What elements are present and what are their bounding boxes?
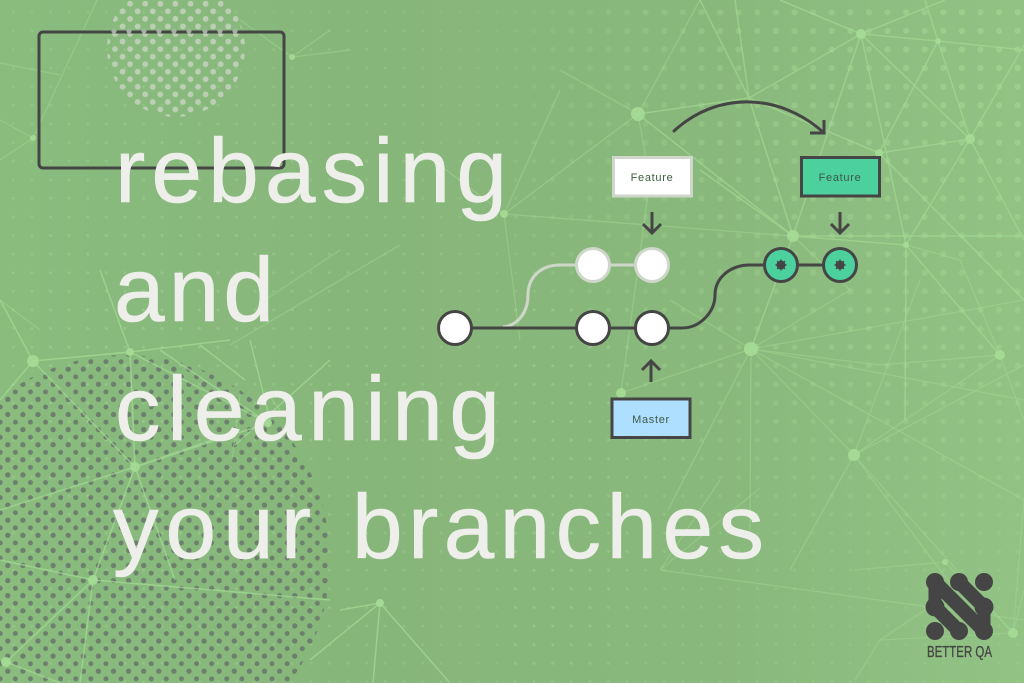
title: and bbox=[114, 240, 274, 341]
light halftone circle bbox=[107, 0, 245, 117]
git rebase diagram bbox=[438, 102, 880, 438]
logo: Better QA bbox=[926, 573, 994, 661]
title: cleaning bbox=[115, 359, 500, 460]
title: branches bbox=[352, 477, 764, 578]
commit markers bbox=[776, 260, 846, 270]
pointer arrows bbox=[642, 212, 849, 382]
new feature label bbox=[802, 158, 880, 196]
curved rebase arrow bbox=[674, 102, 824, 133]
title bbox=[113, 121, 764, 578]
master label bbox=[612, 399, 690, 438]
old feature label bbox=[614, 158, 692, 196]
outlined rectangle bbox=[39, 32, 284, 168]
master label: Master bbox=[632, 414, 670, 426]
logo wordmark: BETTER QA bbox=[927, 644, 992, 661]
light dots over rectangle edge bbox=[111, 28, 238, 34]
old feature label: Feature bbox=[631, 172, 673, 184]
title: rebasing bbox=[115, 121, 507, 222]
master branch and rebased branch bbox=[438, 248, 856, 344]
new feature label: Feature bbox=[819, 172, 861, 184]
old feature branch bbox=[503, 248, 668, 327]
dark halftone circle bbox=[0, 355, 330, 683]
title: your bbox=[113, 477, 311, 578]
logo mark bbox=[926, 573, 994, 640]
